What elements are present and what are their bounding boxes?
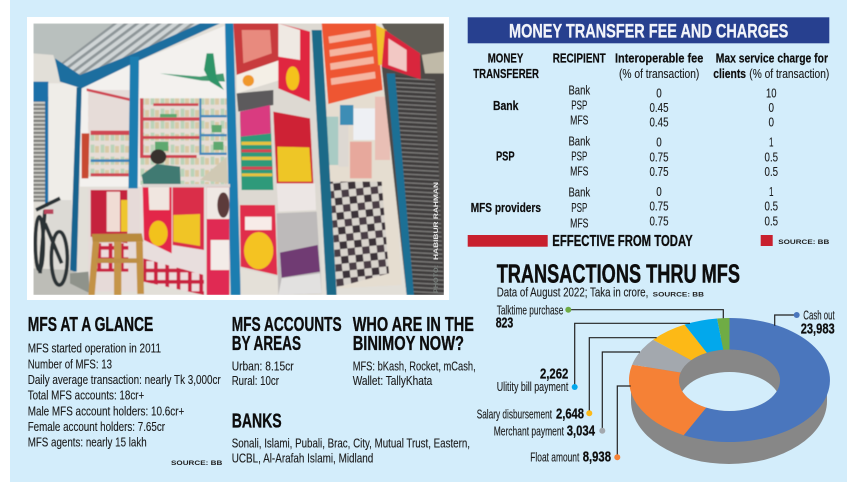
panel: money transfer fee table xyxy=(468,17,830,250)
table column: max service charge values: 0 xyxy=(769,100,774,115)
table column: max service charge values: 1 xyxy=(769,184,774,199)
area figures: Urban: 8.15cr xyxy=(232,359,294,374)
table rows: transferer names xyxy=(471,98,541,215)
panel: transactions thru MFS xyxy=(477,258,835,466)
photo credit: PHOTO: xyxy=(433,265,440,293)
label: merchant payment: 3,034 xyxy=(567,423,595,439)
table column: max service charge values: 0.5 xyxy=(765,150,778,165)
facts list xyxy=(28,340,221,450)
table column: interoperable fee values: 0.75 xyxy=(650,199,668,214)
table rows: recipients: PSP xyxy=(571,200,587,215)
table rows: recipients: MFS xyxy=(570,113,589,128)
table column: max service charge values: 0.5 xyxy=(765,164,778,179)
table column: max service charge values: 1 xyxy=(769,135,774,150)
table column headers: (% of transaction) xyxy=(749,66,829,81)
photo: mobile financial services agent shop xyxy=(27,17,449,300)
table rows: transferer names: Bank xyxy=(493,98,519,113)
facts list: Male MFS account holders: 10.6cr+ xyxy=(28,403,184,418)
label: utility bill payment: Ulitity bill payment xyxy=(497,379,569,394)
heading: BANKS xyxy=(232,409,282,432)
participants: MFS: bKash, Rocket, mCash, xyxy=(353,359,476,374)
table column: interoperable fee values: 0.75 xyxy=(650,164,668,179)
panel: banks xyxy=(232,409,470,466)
table source xyxy=(761,235,830,246)
label: cash out xyxy=(775,308,835,337)
source: SOURCE: BB xyxy=(171,460,223,467)
heading: WHO ARE IN THE xyxy=(353,313,474,336)
table title bar xyxy=(468,17,829,43)
table column headers: Max service charge for xyxy=(716,51,828,66)
segment: salary disbursement xyxy=(653,325,707,360)
table column: interoperable fee values: 0.45 xyxy=(650,115,668,130)
label: merchant payment: Merchant payment xyxy=(494,423,564,438)
heading: BINIMOY NOW? xyxy=(353,332,464,355)
table rows: recipients: PSP xyxy=(571,97,587,112)
area figures xyxy=(232,359,294,388)
participants xyxy=(353,359,476,388)
label: talktime purchase xyxy=(496,302,723,332)
table column: max service charge values: 0.5 xyxy=(765,213,778,228)
table column: interoperable fee values: 0.45 xyxy=(650,100,668,115)
label: cash out: Cash out xyxy=(803,308,835,323)
segment: float amount xyxy=(629,365,706,435)
photo credit: HABIBUR RAHMAN xyxy=(433,182,440,260)
label: talktime purchase: Talktime purchase xyxy=(497,302,563,317)
segment: talktime purchase xyxy=(717,318,730,350)
label: float amount: 8,938 xyxy=(583,450,611,466)
facts list: MFS agents: nearly 15 lakh xyxy=(28,435,147,450)
donut inner wall and hole xyxy=(679,372,780,411)
label: merchant payment xyxy=(494,352,640,439)
bank names: UCBL, Al-Arafah Islami, Midland xyxy=(232,451,373,466)
table column headers xyxy=(473,51,829,81)
table column: interoperable fee values: 0.75 xyxy=(650,213,668,228)
table column: interoperable fee values: 0 xyxy=(656,184,662,199)
label: salary disbursement: 2,648 xyxy=(556,407,584,423)
table column headers: MONEY xyxy=(488,51,524,66)
panel: who are in the Binimoy now xyxy=(353,313,476,388)
table rows: recipients: MFS xyxy=(570,215,589,230)
segment: merchant payment xyxy=(632,340,691,372)
heading xyxy=(353,313,474,355)
label: salary disbursement xyxy=(477,338,657,423)
segment: utility bill payment xyxy=(684,318,723,353)
label: utility bill payment: 2,262 xyxy=(540,366,568,382)
table column headers: RECIPIENT xyxy=(553,51,606,66)
table column headers: TRANSFERER xyxy=(473,66,539,81)
facts list: Total MFS accounts: 18cr+ xyxy=(28,387,144,402)
facts list: MFS started operation in 2011 xyxy=(28,340,161,355)
effective from today strip: EFFECTIVE FROM TODAY xyxy=(552,233,693,250)
table column: interoperable fee values: 0.75 xyxy=(650,150,668,165)
table column: max service charge values xyxy=(765,85,778,228)
subtitle and source: Data of August 2022; Taka in crore, xyxy=(497,285,648,300)
table column: interoperable fee values xyxy=(650,85,668,228)
facts list: Number of MFS: 13 xyxy=(28,356,112,371)
facts list: Daily average transaction: nearly Tk 3,000cr xyxy=(28,372,221,387)
label: float amount xyxy=(530,386,631,466)
panel: MFS accounts by areas xyxy=(232,313,342,388)
heading: MFS ACCOUNTS xyxy=(232,313,342,336)
label: cash out: 23,983 xyxy=(801,321,835,337)
table rows: recipients: Bank xyxy=(568,83,591,98)
heading: MFS AT A GLANCE xyxy=(28,313,153,336)
effective from today strip xyxy=(468,233,693,250)
table rows: recipients xyxy=(568,83,591,230)
bank names xyxy=(232,435,470,466)
area figures: Rural: 10cr xyxy=(232,373,279,388)
table rows: transferer names: PSP xyxy=(496,148,515,163)
table column headers: clients xyxy=(713,66,746,81)
table column: interoperable fee values: 0 xyxy=(656,135,662,150)
table rows: recipients: Bank xyxy=(568,134,591,149)
panel: MFS at a glance xyxy=(28,313,223,467)
table column: max service charge values: 0.5 xyxy=(765,199,778,214)
donut chart xyxy=(629,318,830,464)
label: utility bill payment xyxy=(497,323,690,394)
table rows: transferer names: MFS providers xyxy=(471,200,541,215)
segment: cash out xyxy=(684,318,830,442)
table column headers: Interoperable fee xyxy=(615,51,703,66)
label: salary disbursement: Salary disbursement xyxy=(477,407,552,422)
photo credit xyxy=(433,182,440,293)
bank names: Sonali, Islami, Pubali, Brac, City, Mutual Trust, Eastern, xyxy=(232,435,470,450)
table rows: recipients: MFS xyxy=(570,164,589,179)
heading: TRANSACTIONS THRU MFS xyxy=(497,258,740,288)
table column: interoperable fee values: 0 xyxy=(656,85,662,100)
facts list: Female account holders: 7.65cr xyxy=(28,419,165,434)
participants: Wallet: TallyKhata xyxy=(353,373,433,388)
table column: max service charge values: 0 xyxy=(769,115,774,130)
table source: SOURCE: BB xyxy=(778,239,830,246)
heading: BY AREAS xyxy=(232,332,301,355)
table column headers: (% of transaction) xyxy=(619,66,699,81)
table rows: recipients: Bank xyxy=(568,185,591,200)
table rows: recipients: PSP xyxy=(571,149,587,164)
table column: max service charge values: 10 xyxy=(766,85,777,100)
label: float amount: Float amount xyxy=(530,450,580,465)
label: talktime purchase: 823 xyxy=(496,316,513,332)
heading xyxy=(232,313,342,355)
subtitle and source: SOURCE: BB xyxy=(653,292,704,299)
